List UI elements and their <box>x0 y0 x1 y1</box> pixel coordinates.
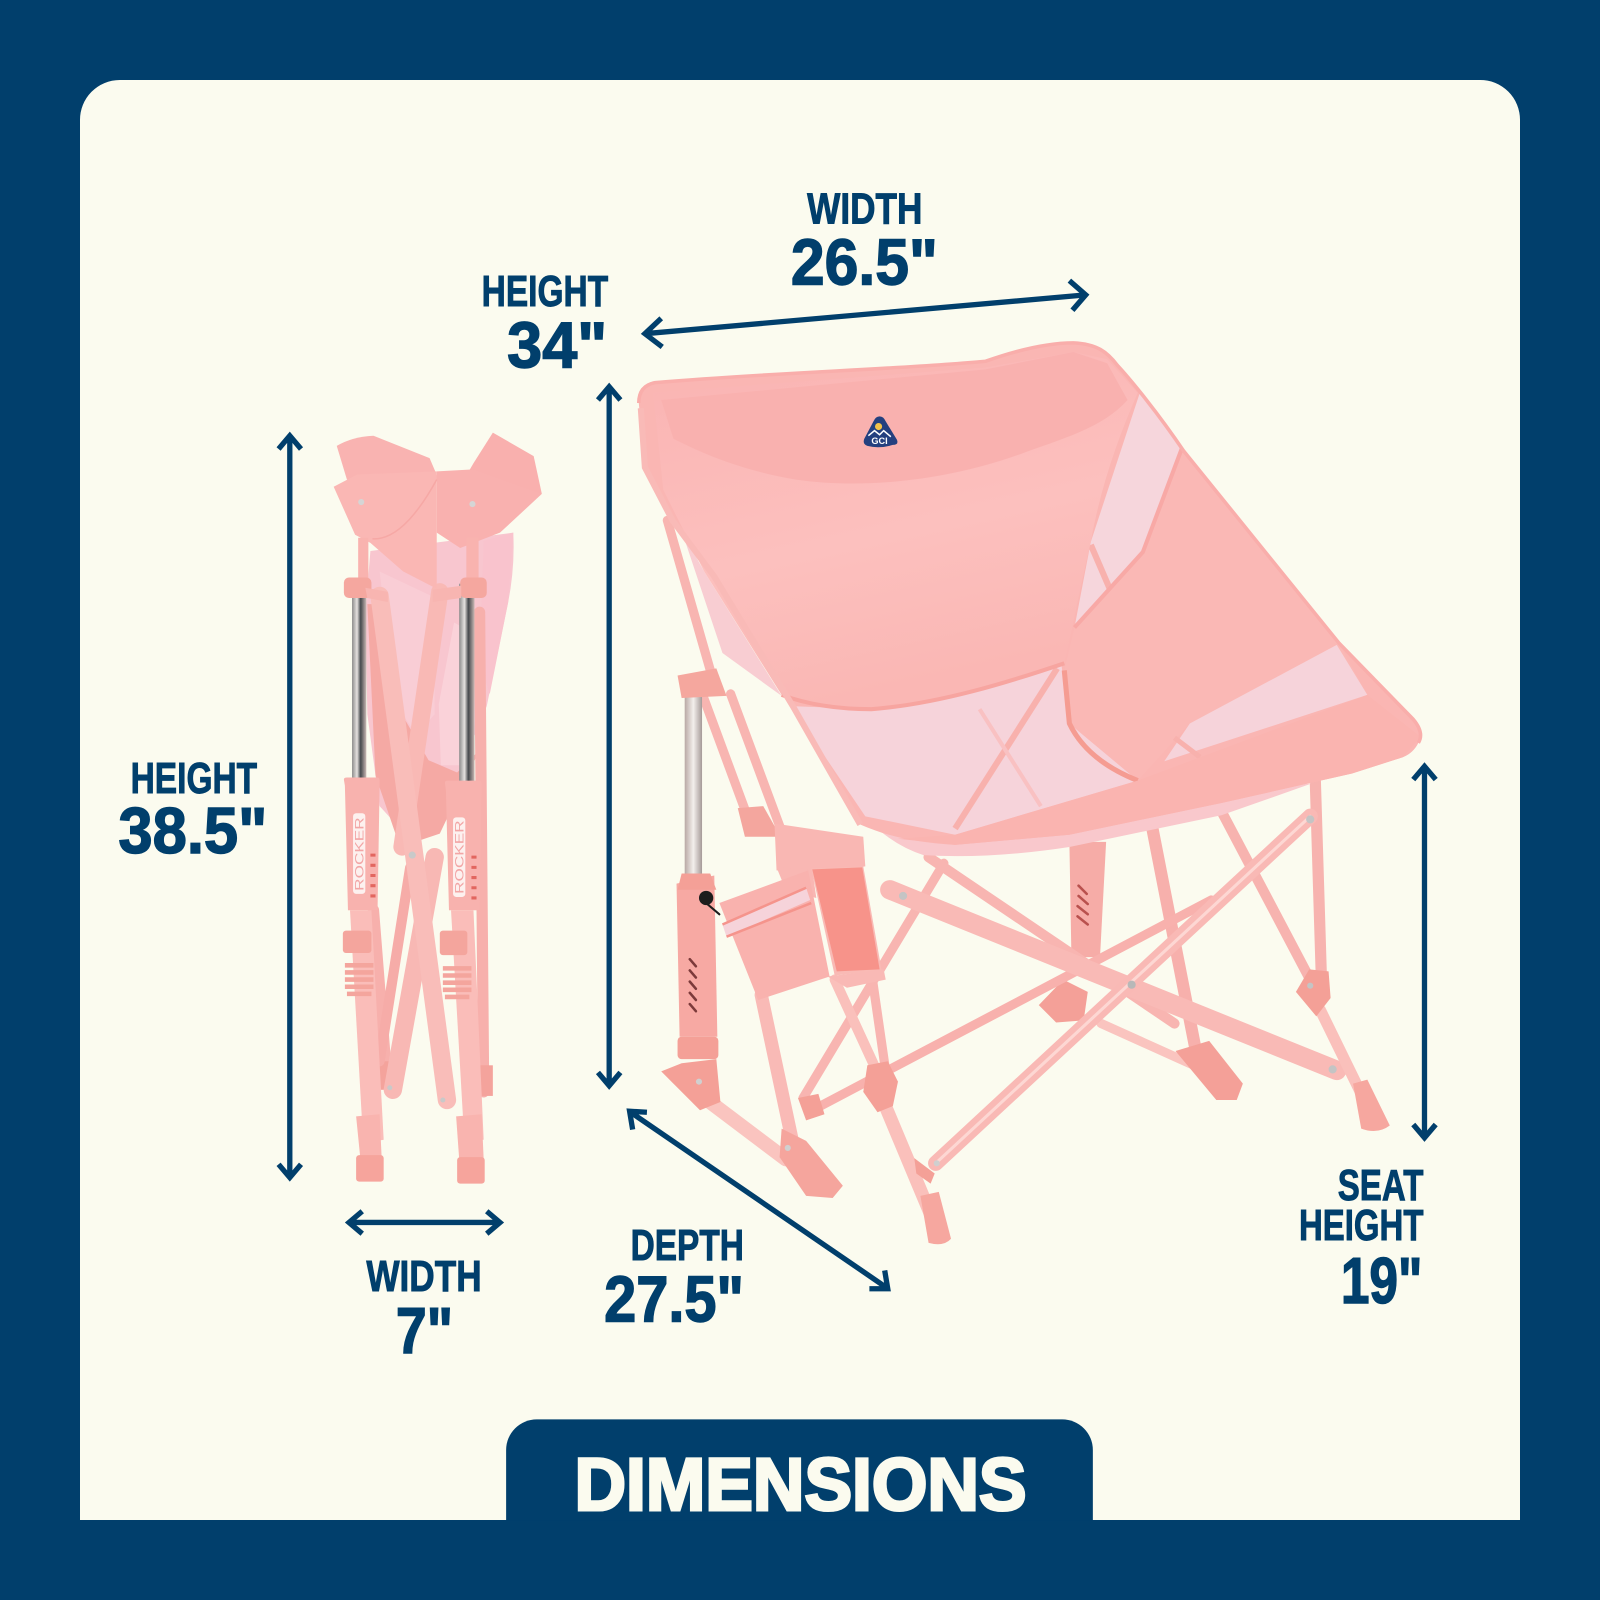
seat edge binding <box>639 343 1421 743</box>
label: width 26.5: 26.5" <box>791 226 938 299</box>
chair frame: front right leg <box>1296 969 1390 1131</box>
chair seat <box>639 343 1421 856</box>
seat left edge binding <box>641 408 860 824</box>
dimension arrow: folded width <box>349 1211 500 1234</box>
folded chair: lower left housing <box>343 778 384 1182</box>
upper back panel <box>653 352 1138 709</box>
chair frame: front left leg <box>835 980 951 1244</box>
folded chair <box>334 433 542 1184</box>
chair frame: left foot rail <box>661 995 843 1198</box>
label: folded height 38.5: HEIGHT <box>131 754 257 803</box>
dimension arrow: depth <box>630 1111 888 1289</box>
logo text: GCI <box>871 436 888 446</box>
lower mesh <box>791 663 1138 835</box>
label: height 34: HEIGHT <box>482 267 608 316</box>
seat fabric outline <box>639 343 1421 845</box>
title: DIMENSIONS <box>574 1443 1027 1526</box>
label: width 26.5 <box>791 184 938 299</box>
label: seat height 19: SEAT <box>1338 1161 1424 1210</box>
label: width 26.5: WIDTH <box>807 184 922 233</box>
chair frame: rear legs and post <box>1039 781 1321 1100</box>
pocket panel <box>1064 449 1367 781</box>
folded chair: inner fabric <box>365 533 514 847</box>
chair frame: cross bars <box>803 815 1337 1163</box>
label: depth 27.5 <box>604 1221 744 1335</box>
dimension arrow: width <box>645 281 1086 347</box>
front band <box>898 695 1420 845</box>
label: folded width 7: WIDTH <box>366 1252 482 1301</box>
folded chair: rear legs <box>373 612 493 1096</box>
upper panel hem <box>782 663 1064 709</box>
cup holder <box>719 823 886 1000</box>
seat underside strip <box>878 784 1311 856</box>
dimension arrow: height 34 <box>598 387 620 1086</box>
rocker label left: ROCKER <box>352 817 366 891</box>
dimension arrow: seat height <box>1413 766 1436 1138</box>
folded chair: lower right housing <box>440 781 485 1184</box>
label: folded width 7 <box>366 1252 482 1367</box>
upper right mesh <box>1074 393 1182 628</box>
label: seat height 19: 19" <box>1341 1244 1422 1317</box>
label: seat height 19 <box>1299 1161 1424 1317</box>
headrest shading <box>661 352 1128 484</box>
right mesh <box>1164 645 1367 761</box>
title tab <box>506 1419 1093 1526</box>
folded chair: crossing bars <box>378 590 447 1103</box>
label: seat height 19: HEIGHT <box>1299 1201 1424 1250</box>
mesh struts <box>955 668 1057 829</box>
rocker label right: ROCKER <box>452 820 466 894</box>
dimension arrow: folded height <box>279 436 301 1178</box>
chair frame: left rear leg and pole <box>667 520 781 1059</box>
label: depth 27.5: DEPTH <box>631 1221 744 1270</box>
label: depth 27.5: 27.5" <box>604 1262 744 1335</box>
folded chair: top posts and collars <box>344 538 487 602</box>
label: folded height 38.5 <box>118 754 267 867</box>
logo: GCI badge <box>864 416 897 447</box>
folded chair: steel rods <box>352 584 474 784</box>
label: height 34 <box>482 267 608 381</box>
label: height 34: 34" <box>507 308 607 381</box>
side mesh left <box>682 531 782 696</box>
folded chair: top fabric <box>334 433 542 589</box>
label: folded height 38.5: 38.5" <box>118 794 267 867</box>
label: folded width 7: 7" <box>396 1294 453 1367</box>
main chair <box>639 343 1421 1244</box>
